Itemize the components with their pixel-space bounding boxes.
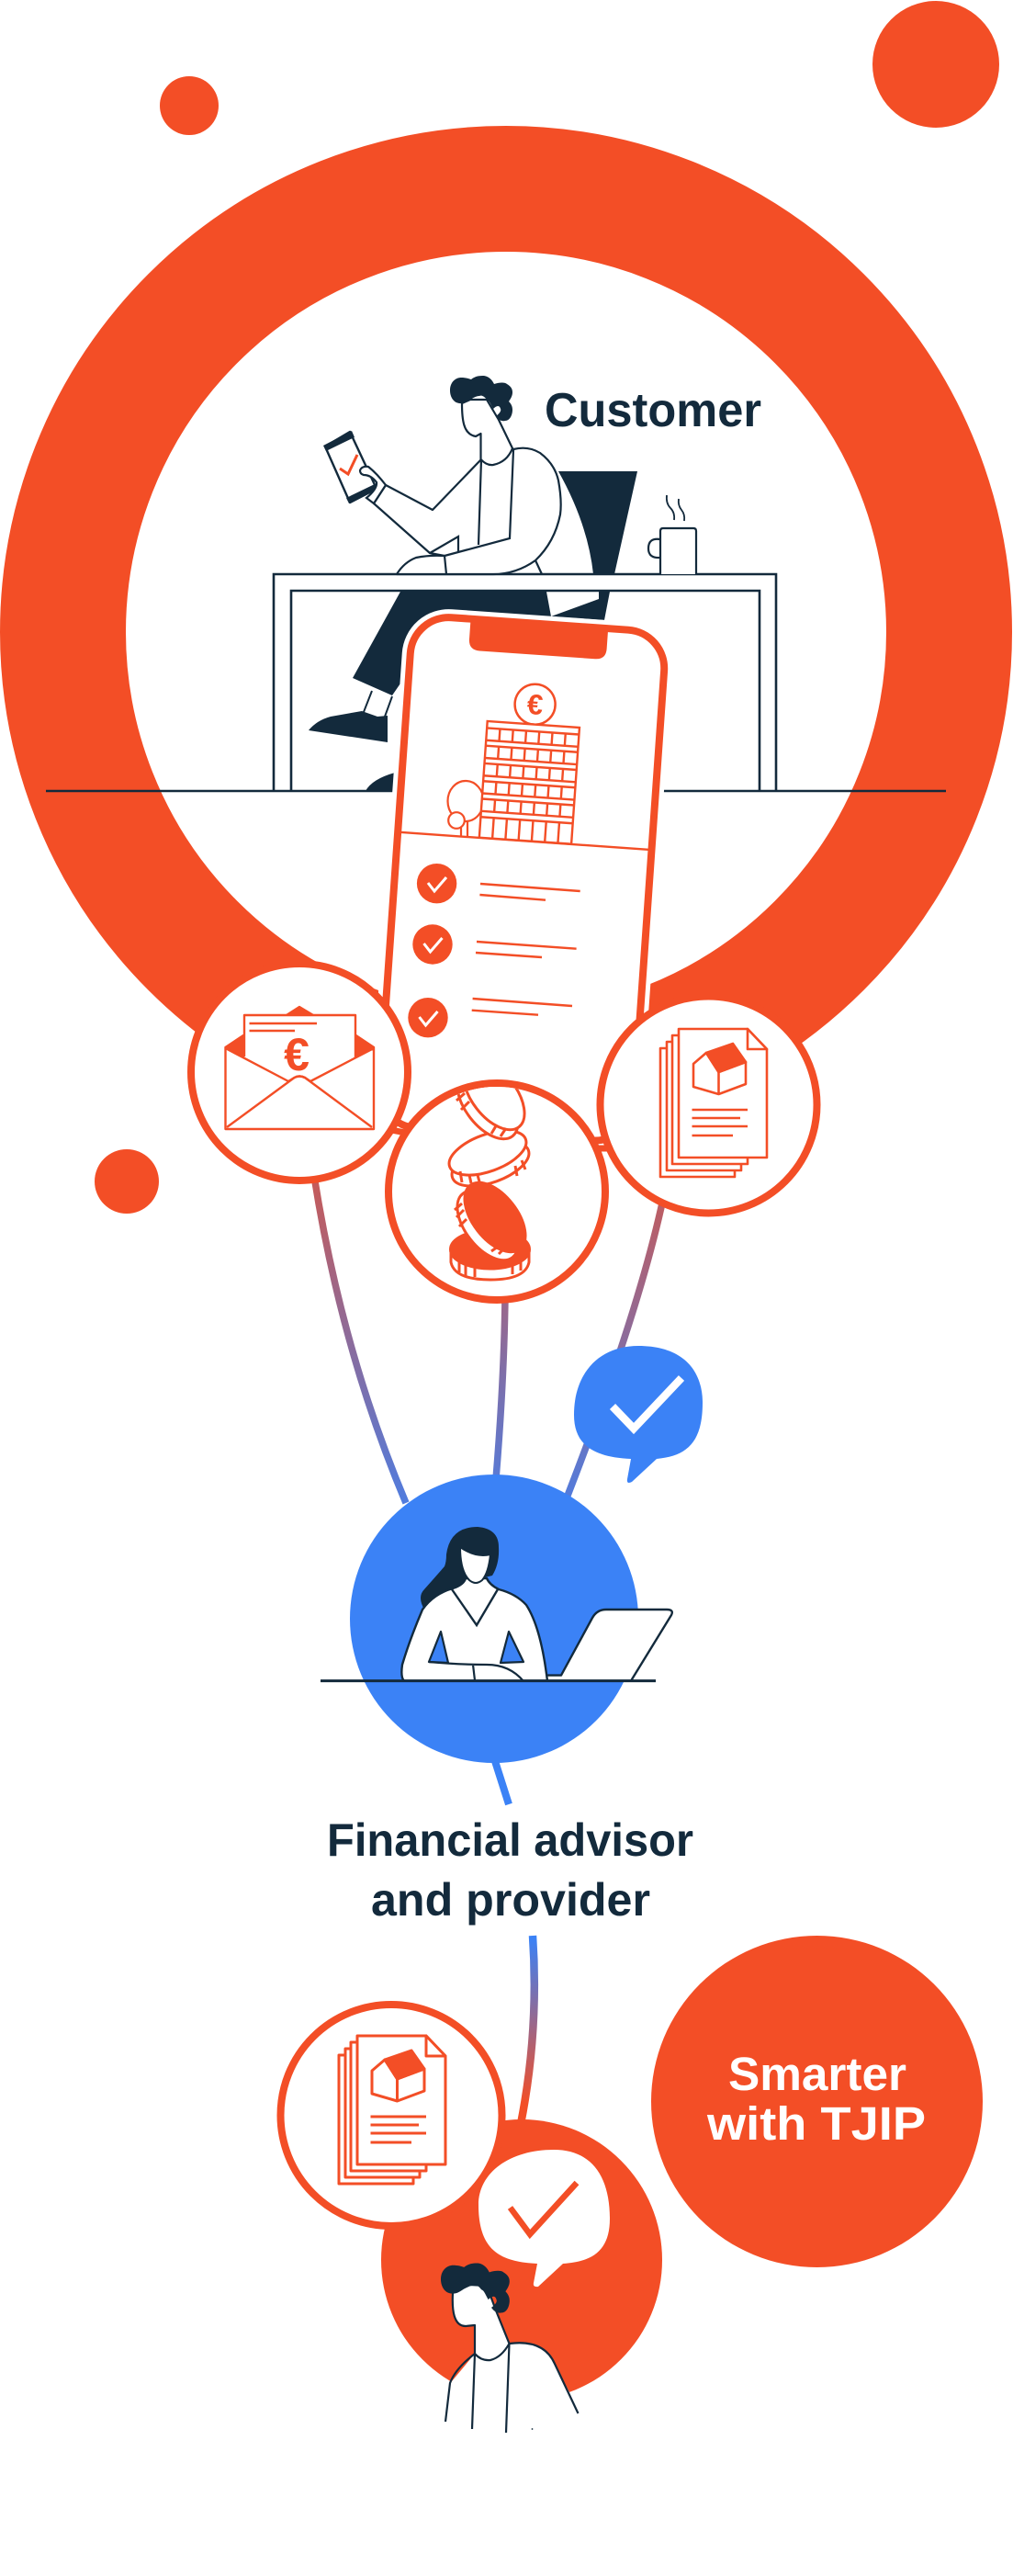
- sock: [364, 691, 392, 717]
- coin 2: [448, 1131, 531, 1187]
- heading: financial advisor and provider: Financial advisor: [327, 1814, 693, 1866]
- bridge between coins and documents: [597, 1145, 610, 1152]
- body: [401, 1578, 547, 1681]
- chair: [558, 471, 637, 574]
- advisor blue circle: [350, 1474, 638, 1763]
- connector to approved customer: [521, 1936, 535, 2124]
- phone halo and body: [377, 615, 667, 1143]
- coin 1: [456, 1087, 526, 1141]
- circle: documents: [601, 996, 817, 1213]
- bridge between envelope and coins: [391, 1130, 403, 1132]
- head and neck: [462, 400, 512, 465]
- circle: approved documents: [281, 2005, 501, 2226]
- coin 4: [450, 1230, 529, 1280]
- back shoe: [366, 773, 395, 791]
- smartphone app screen: [377, 615, 667, 1143]
- hand: [360, 467, 386, 503]
- arms: [429, 1662, 523, 1681]
- face: [460, 1547, 490, 1583]
- decorative circle: top left: [160, 76, 219, 135]
- laptop: [521, 1610, 672, 1681]
- table line: [321, 1679, 656, 1682]
- coffee mug: [648, 495, 696, 574]
- euro coin: [515, 684, 556, 725]
- speech bubble: white check: [478, 2150, 610, 2287]
- building: [479, 721, 580, 844]
- circle: coins: [388, 1050, 605, 1300]
- hair: [450, 376, 512, 421]
- front shoe: [309, 711, 388, 742]
- icon: document stack with house: [339, 2036, 445, 2184]
- customer orange circle: [381, 2119, 662, 2401]
- shirt speck: [532, 2428, 533, 2430]
- desk: [274, 574, 776, 791]
- hair: [441, 2264, 510, 2313]
- body outlines: [445, 2343, 579, 2433]
- heading: financial advisor and provider: and provider: [371, 1874, 650, 1926]
- arm gap right: [501, 1632, 523, 1663]
- arm gap left: [429, 1632, 448, 1663]
- checklist row 2: [412, 924, 577, 965]
- screen divider: [400, 832, 649, 850]
- badge: smarter with TJIP: Smarter: [728, 2048, 906, 2100]
- horizon line: [46, 790, 946, 792]
- checklist row 1: [417, 864, 580, 903]
- trees: [448, 781, 483, 837]
- customer at desk illustration: [46, 376, 946, 791]
- euro coin: €: [526, 688, 544, 721]
- neck and face: [453, 2285, 509, 2360]
- coin 3: [454, 1181, 527, 1259]
- shirt details: [430, 450, 542, 574]
- heading: financial advisor and provider: [327, 1814, 693, 1926]
- happy customer: [441, 2264, 580, 2444]
- torso and arms: [374, 448, 561, 574]
- notch: [468, 619, 608, 660]
- checklist row 3: [408, 998, 572, 1037]
- handheld phone: [323, 431, 378, 503]
- decorative circle: lower left: [95, 1149, 159, 1214]
- hair: [421, 1527, 499, 1610]
- icon: document stack with house: [660, 1029, 767, 1177]
- icon: envelope with euro letter: €: [284, 1029, 310, 1080]
- big orange ring: [62, 189, 950, 1075]
- connector below advisor: [495, 1761, 509, 1804]
- badge: smarter with TJIP: [651, 1936, 983, 2267]
- circle: envelope: [191, 964, 408, 1181]
- collar: [452, 1589, 498, 1625]
- financial advisor illustration: [321, 1527, 672, 1681]
- body: [445, 2343, 580, 2444]
- icon: coin stack: [448, 1087, 531, 1281]
- trousers: [353, 592, 551, 695]
- decorative circle: top right: [872, 1, 999, 128]
- chair base: [551, 592, 610, 620]
- connector lines to advisor: [314, 1176, 663, 1503]
- customer label: Customer: [545, 384, 761, 437]
- speech bubble: blue check: [574, 1346, 703, 1483]
- icon: envelope with euro letter: [226, 1007, 374, 1129]
- badge: smarter with TJIP: with TJIP: [706, 2097, 926, 2150]
